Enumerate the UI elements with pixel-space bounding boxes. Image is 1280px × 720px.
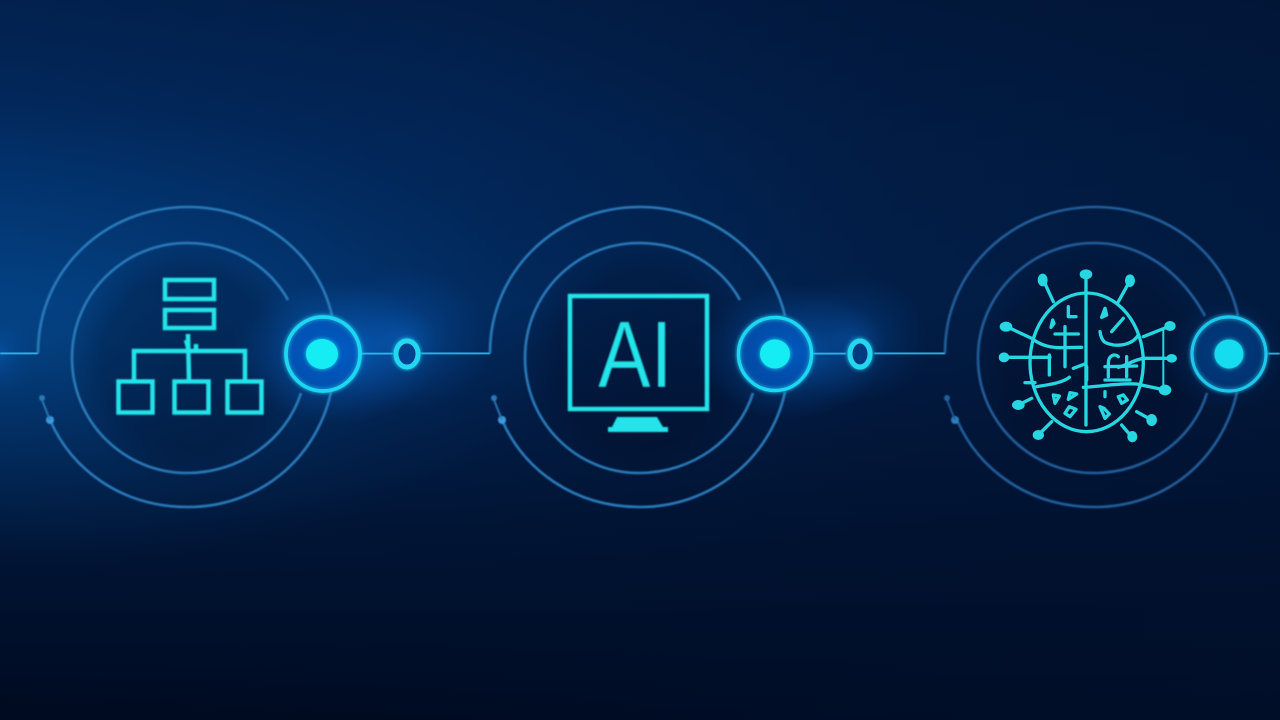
module 1: rings [38,207,332,507]
icon: AI monitor [570,296,707,432]
node 1 [286,317,418,391]
module 3: rings [944,207,1238,507]
connector lines [0,353,1280,354]
module 2: rings [490,207,785,507]
node 2 [738,318,870,390]
label: AI: AI [598,302,672,408]
icon: org chart [118,280,262,412]
icon: brain [999,269,1177,442]
glow bands behind nodes [0,240,1280,484]
node 3 [1192,317,1266,391]
